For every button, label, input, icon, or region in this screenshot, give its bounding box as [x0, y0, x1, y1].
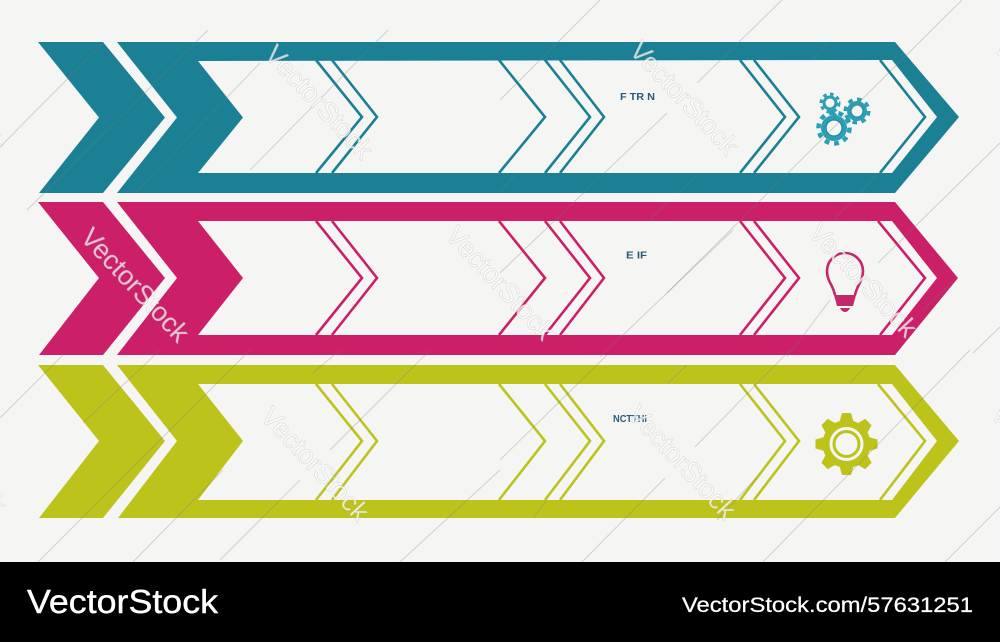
panel: olive arrow row	[38, 365, 959, 518]
panel: magenta arrow row	[38, 202, 958, 355]
teal label: F TR N	[620, 92, 655, 103]
magenta inner chevrons	[316, 221, 925, 335]
watermarks: VectorStock	[624, 35, 744, 161]
magenta label: E IF	[626, 250, 647, 262]
olive label: NCTTHI	[613, 414, 647, 425]
olive inner chevrons	[316, 384, 925, 500]
icon: three gears	[818, 94, 869, 144]
magenta chevron	[38, 202, 165, 355]
watermarks: VectorStock	[803, 217, 923, 343]
olive chevron	[38, 365, 165, 518]
watermarks: VectorStock	[75, 222, 195, 348]
icon: cog	[816, 413, 878, 475]
olive arrow frame	[117, 365, 959, 518]
watermarks: VectorStock	[440, 220, 560, 346]
footer logo text: VectorStock	[27, 583, 219, 620]
teal arrow frame	[117, 42, 959, 193]
watermarks: VectorStock	[255, 401, 375, 527]
watermarks: VectorStock	[259, 39, 379, 165]
icon: light bulb	[827, 253, 863, 312]
teal inner chevrons	[316, 60, 925, 173]
footer url text: VectorStock.com/57631251	[682, 594, 973, 617]
magenta arrow frame	[117, 202, 958, 355]
watermarks	[0, 32, 1000, 527]
watermarks: VectorStock	[622, 399, 742, 525]
panel: teal arrow row	[38, 42, 959, 193]
teal chevron	[38, 42, 165, 193]
footer bar	[0, 562, 1000, 642]
